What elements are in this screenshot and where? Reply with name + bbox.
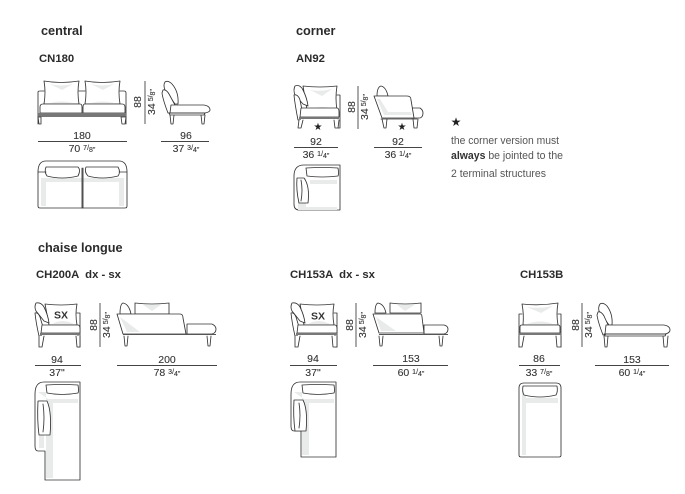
- dimension: CH153B right width: 1: [633, 369, 637, 376]
- dimension: AN92 height: /: [361, 100, 368, 102]
- drawing: CH153B top view: [519, 383, 561, 457]
- dimension: CH153B right width: 4": [639, 371, 646, 378]
- note: corner version: ★: [451, 115, 461, 129]
- dimension: CN180 width: 7: [83, 145, 87, 152]
- dimension: AN92 left width: 4": [323, 153, 330, 160]
- dimension: CH153A height: [344, 303, 369, 347]
- drawing: CN180 side view: [162, 81, 210, 124]
- icon: star: ★: [314, 122, 323, 133]
- dimension: height 88: [132, 81, 158, 124]
- dimension: CH153B height: 5: [585, 320, 592, 326]
- dimension: CH153B right width: 60: [619, 367, 630, 379]
- dimension: CH153B height: 88: [570, 319, 582, 331]
- dimension: CH200A height: 88: [88, 319, 100, 331]
- dimension: height 88: 5: [148, 97, 155, 103]
- drawing: AN92 side view: [374, 86, 423, 128]
- dimension: height 88: 34: [146, 103, 158, 115]
- dimension: AN92 height: 34: [359, 108, 371, 120]
- drawing: CN180 front view: [38, 81, 126, 124]
- dimension: CH153A right width: /: [416, 369, 418, 376]
- dimension: CH153A right width: 153: [402, 353, 420, 365]
- dimension: CH153A left width: 37": [305, 367, 321, 379]
- dimension: CN180 width: 8": [89, 147, 96, 154]
- dimension: CN180 depth: /: [191, 145, 193, 152]
- dimension: CH200A right width: 4": [174, 371, 181, 378]
- dimension: CH153B right width: [595, 354, 669, 379]
- dimension: CN180 depth: 37: [173, 143, 184, 155]
- drawing: CH153A side view: [373, 303, 448, 346]
- heading: central: central: [41, 24, 83, 38]
- dimension: CH200A right width: /: [172, 369, 174, 376]
- dimension: height 88: /: [148, 95, 155, 97]
- drawing: CH153A top view: [291, 382, 336, 457]
- dimension: CH153A right width: 60: [398, 367, 409, 379]
- dimension: CH153A right width: [373, 353, 448, 379]
- dimension: CH200A right width: 3: [168, 369, 172, 376]
- dimension: CH200A height: 5: [103, 320, 110, 326]
- dimension: AN92 right width: 1: [399, 151, 403, 158]
- dimension: CH153A right width: 1: [412, 369, 416, 376]
- dimension: CH153B right width: /: [637, 369, 639, 376]
- note: corner version: always be jointed to the: [451, 150, 563, 162]
- code: CH153A: CH153A dx - sx: [290, 269, 376, 281]
- dimension: AN92 right width: 4": [405, 153, 412, 160]
- dimension: CH200A right width: 78: [154, 367, 165, 379]
- code: CH200A: CH200A dx - sx: [36, 269, 122, 281]
- dimension: CN180 depth: 4": [193, 147, 200, 154]
- heading: corner: corner: [296, 24, 336, 38]
- icon: star: ★: [398, 122, 407, 133]
- drawing: AN92 front view: [294, 86, 340, 128]
- dimension: CN180 width: [38, 130, 127, 155]
- dimension: height 88: 8": [150, 89, 157, 95]
- dimension: AN92 right width: 36: [385, 149, 396, 161]
- dimension: CH153A left width: [290, 353, 337, 379]
- note: corner version: the corner version must: [451, 135, 559, 147]
- dimension: CN180 depth: 3: [187, 145, 191, 152]
- dimension: CH153B left width: 7: [540, 369, 544, 376]
- dimension: CH153A height: 88: [344, 319, 356, 331]
- dimension: CH200A height: 8": [105, 312, 112, 318]
- dimension: AN92 right width: /: [403, 151, 405, 158]
- dimension: AN92 height: 88: [346, 101, 358, 113]
- dimension: AN92 height: 8": [363, 94, 370, 100]
- dimension: CH153B right width: 153: [623, 354, 641, 366]
- dimension: CN180 width: 70: [69, 143, 80, 155]
- dimension: CH153B height: /: [585, 318, 592, 320]
- drawing: CH200A top view: [35, 382, 80, 480]
- dimension: CH153A right width: 4": [418, 371, 425, 378]
- dimension: CH200A height: /: [103, 318, 110, 320]
- dimension: AN92 right width: 92: [392, 136, 404, 148]
- dimension: CH153A left width: 94: [307, 353, 319, 365]
- dimension: CH200A right width: 200: [158, 354, 176, 366]
- dimension: CH153A height: 8": [361, 312, 368, 318]
- dimension: AN92 left width: 36: [303, 149, 314, 161]
- dimension: AN92 left width: /: [321, 151, 323, 158]
- dimension: CH153A height: 34: [357, 326, 369, 338]
- dimension: CH153A height: 5: [359, 320, 366, 326]
- note: corner version: [451, 115, 563, 180]
- dimension: CH153B height: 34: [583, 326, 595, 338]
- dimension: CH153B left width: /: [544, 369, 546, 376]
- drawing: CH200A side view: [117, 303, 216, 346]
- drawing: CH153A front view: [291, 303, 337, 347]
- dimension: CH200A height: [88, 303, 113, 347]
- dimension: CN180 width: /: [87, 145, 89, 152]
- drawing: CH153B side view: [597, 303, 670, 347]
- dimension: CH153B left width: 33: [526, 367, 537, 379]
- dimension: CN180 width: 180: [73, 130, 91, 142]
- dimension: CH153B left width: 8": [546, 371, 553, 378]
- dimension: AN92 height: [346, 86, 371, 129]
- dimension: AN92 left width: 1: [317, 151, 321, 158]
- dimension: CH153B height: 8": [587, 312, 594, 318]
- label: SX: SX: [54, 310, 68, 322]
- dimension: height 88: 88: [132, 96, 144, 108]
- dimension: CH200A left width: 94: [51, 354, 63, 366]
- drawing: CN180 top view: [38, 161, 127, 208]
- dimension: CH153A height: /: [359, 318, 366, 320]
- dimension: CH153B height: [570, 303, 595, 347]
- dimension: AN92 left width: 92: [310, 136, 322, 148]
- dimension: CH200A height: 34: [101, 326, 113, 338]
- dimension: CH200A right width: [117, 354, 217, 379]
- code: CH153B: CH153B: [520, 269, 563, 281]
- heading: chaise longue: chaise longue: [38, 241, 123, 255]
- drawing: AN92 top view: [294, 165, 340, 210]
- label: SX: SX: [311, 310, 325, 322]
- dimension: AN92 left width: [294, 136, 338, 161]
- dimension: CN180 depth: [161, 130, 209, 155]
- dimension: CH200A left width: 37": [49, 367, 65, 379]
- code: AN92: AN92: [296, 53, 325, 65]
- drawing: CH153B front view: [519, 303, 561, 347]
- dimension: AN92 right width: [374, 136, 422, 161]
- note: corner version: 2 terminal structures: [451, 168, 546, 180]
- drawing: CH200A front view: [35, 303, 80, 347]
- dimension: CN180 depth: 96: [180, 130, 192, 142]
- code: CN180: CN180: [39, 53, 74, 65]
- dimension: CH153B left width: 86: [533, 353, 545, 365]
- dimension: CH200A left width: [35, 354, 81, 379]
- dimension: AN92 height: 5: [361, 102, 368, 108]
- dimension: CH153B left width: [519, 353, 560, 379]
